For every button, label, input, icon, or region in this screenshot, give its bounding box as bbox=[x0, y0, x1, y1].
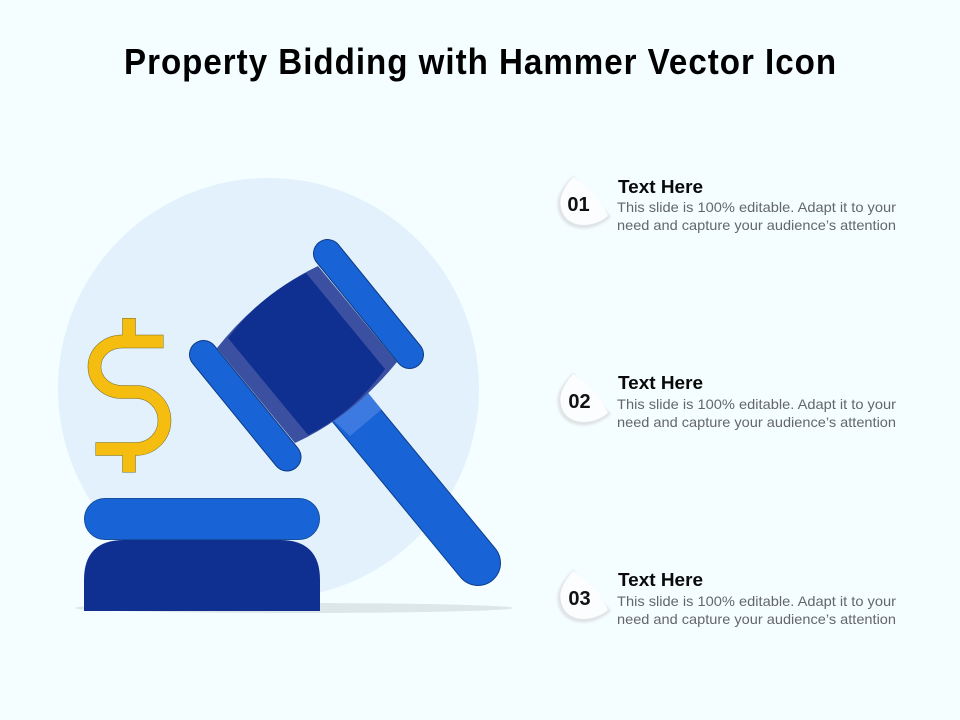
item 01 bbox=[557, 176, 896, 233]
heading 02: Text Here bbox=[618, 373, 703, 393]
gavel lower bar bbox=[204, 354, 287, 457]
description 02: need and capture your audience’s attention bbox=[617, 414, 896, 430]
gavel handle bbox=[334, 392, 478, 563]
title: Property Bidding with Hammer Vector Icon bbox=[124, 43, 836, 82]
description 01: This slide is 100% editable. Adapt it to your bbox=[617, 199, 896, 215]
description 03: This slide is 100% editable. Adapt it to your bbox=[617, 593, 896, 609]
sound block bbox=[84, 498, 320, 611]
description 01: need and capture your audience’s attention bbox=[617, 217, 896, 233]
badge 01 bbox=[557, 176, 611, 229]
description 03: need and capture your audience’s attention bbox=[617, 611, 896, 627]
background circle bbox=[58, 178, 479, 599]
block base bbox=[84, 540, 320, 611]
heading 01: Text Here bbox=[618, 177, 703, 197]
badge 03: 03 bbox=[568, 588, 591, 610]
icon: gavel bbox=[204, 254, 478, 563]
description 02 bbox=[617, 396, 896, 430]
ground shadow bbox=[75, 603, 513, 613]
description 03 bbox=[617, 593, 896, 627]
icon: dollar sign bbox=[94, 318, 164, 472]
gavel head bbox=[217, 266, 397, 443]
gavel upper bar bbox=[328, 254, 410, 354]
badge 02: 02 bbox=[568, 391, 591, 413]
badge 02 bbox=[557, 373, 611, 426]
block top bbox=[84, 498, 320, 540]
badge 01: 01 bbox=[567, 194, 590, 216]
item 02 bbox=[557, 373, 896, 430]
heading 03: Text Here bbox=[618, 570, 703, 590]
badge 03 bbox=[557, 570, 611, 623]
description 02: This slide is 100% editable. Adapt it to your bbox=[617, 396, 896, 412]
description 01 bbox=[617, 199, 896, 233]
item 03 bbox=[557, 570, 896, 627]
